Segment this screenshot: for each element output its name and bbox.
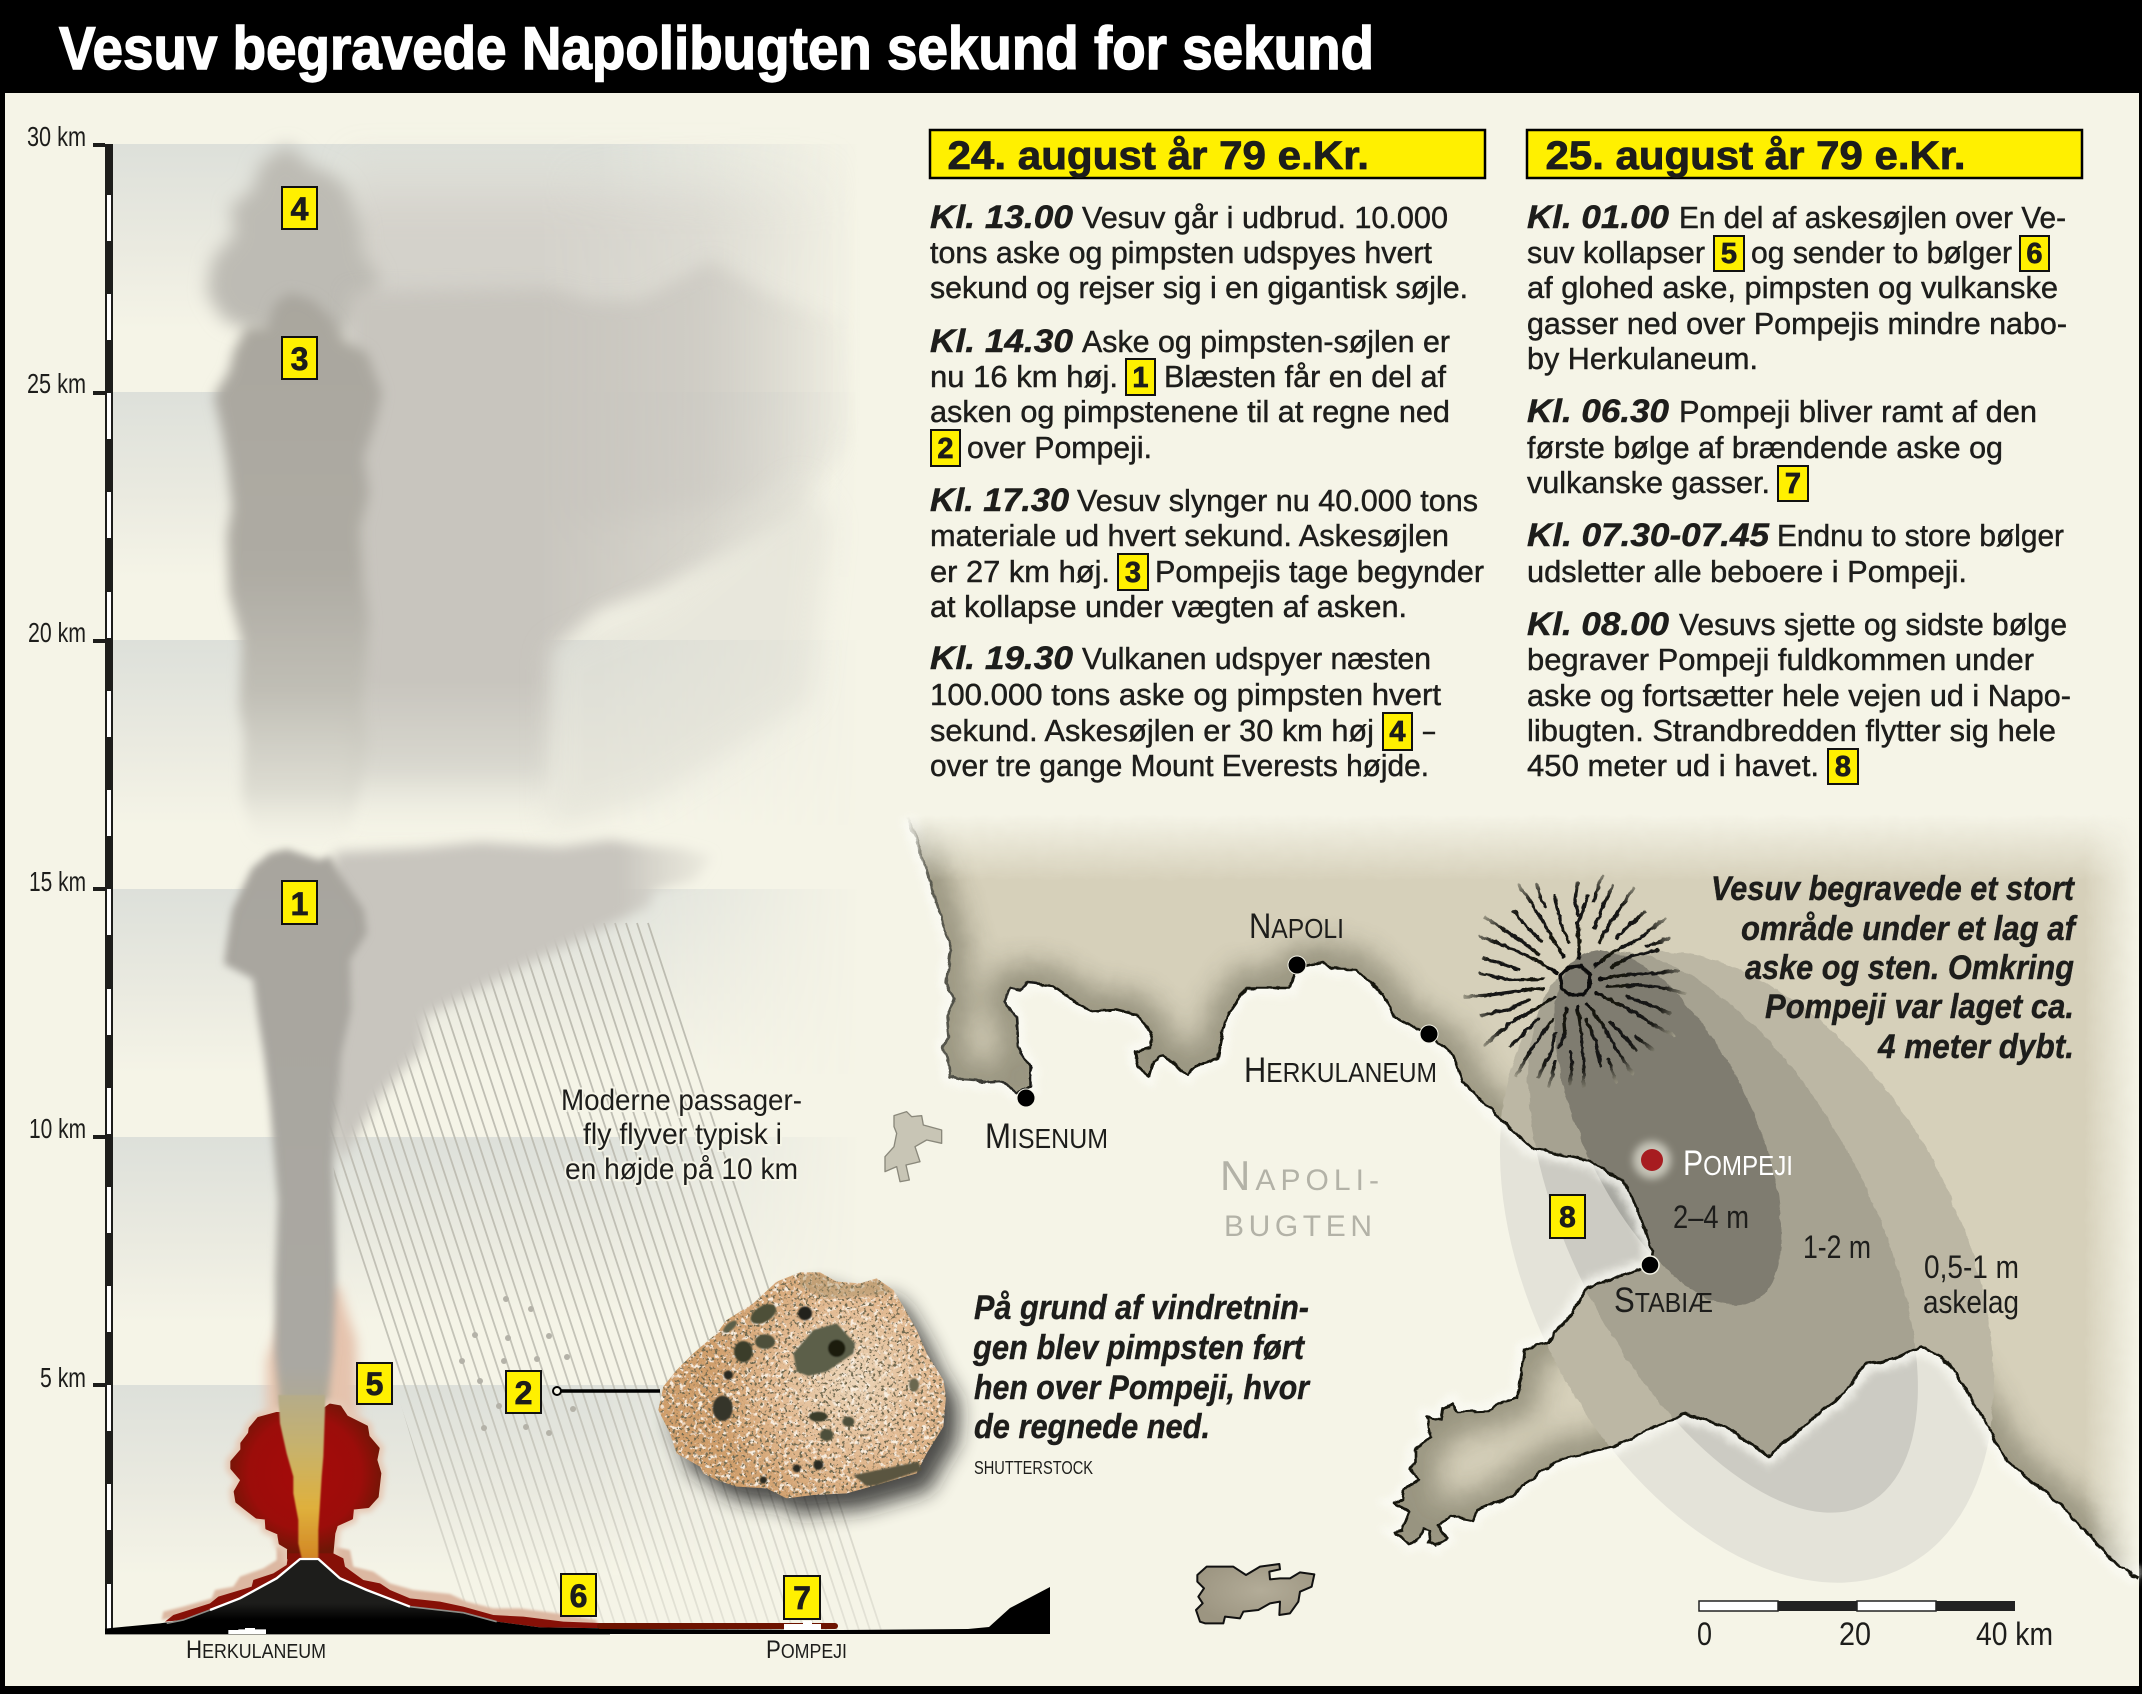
title: Vesuv begravede Napolibugten sekund for sekund (59, 15, 1374, 82)
entry: 19.30: 100.000 tons aske og pimpsten hvert (930, 678, 1442, 712)
entry: 14.30: Aske og pimpsten-søjlen er (1082, 325, 1450, 359)
pumice rain hatching (332, 922, 882, 1630)
entry: 13.00: sekund og rejser sig i en gigantisk søjle. (930, 271, 1468, 305)
badge 2: 2 (515, 1375, 532, 1411)
altitude axis: 25 km (27, 368, 86, 399)
caption: pumice wind direction: de regnede ned. (974, 1408, 1210, 1446)
entry: 06.30: Pompeji bliver ramt af den (1679, 395, 2037, 429)
ash depth labels: askelag (1923, 1284, 2019, 1320)
scale bar: 20 (1839, 1616, 1871, 1652)
entry: 14.30 (930, 323, 1450, 466)
city marker: Pompeji: POMPEJI (1683, 1144, 1793, 1183)
badge 7: 7 (793, 1580, 811, 1616)
entry: 01.00: suv kollapser (1527, 236, 1705, 270)
altitude axis: 30 km (27, 121, 86, 152)
badge 6: 6 (570, 1578, 587, 1614)
badge 2 (506, 1371, 541, 1413)
island: Procida (885, 1112, 942, 1182)
entry: 08.00: 450 meter ud i havet. (1527, 749, 1819, 783)
label: bay name: NAPOLI- (1220, 1152, 1379, 1199)
falling pumice dots (459, 1296, 576, 1436)
map caption: aske og sten. Omkring (1745, 949, 2074, 987)
entry: 14.30: Blæsten får en del af (1164, 360, 1447, 394)
caption: pumice wind direction: På grund af vindretnin- (974, 1289, 1309, 1327)
map caption (1711, 870, 2078, 1066)
entry: 19.30: 4 (1389, 716, 1406, 748)
map caption: område under et lag af (1741, 910, 2078, 948)
entry: 19.30: over tre gange Mount Everests højde. (930, 749, 1429, 783)
badge 8: 8 (1559, 1201, 1576, 1234)
glowing inner column (278, 1395, 325, 1558)
connector line from badge 2 to pumice (553, 1387, 660, 1395)
entry: 19.30: Vulkanen udspyer næsten (1082, 642, 1431, 676)
heading: 24 August: 24. august år 79 e.Kr. (948, 134, 1369, 178)
fire cloud halo (232, 1405, 380, 1558)
pink glow of collapse (267, 1285, 358, 1420)
entry: 07.30-07.45: udsletter alle beboere i Pompeji. (1527, 555, 1967, 589)
badge 1: 1 (291, 886, 308, 922)
entry: 08.00: 8 (1835, 751, 1851, 783)
ash depth labels: 1-2 m (1803, 1229, 1871, 1265)
panel: altitude chart with eruption column (27, 121, 1050, 1664)
panel: 24 August timeline (930, 130, 1485, 783)
entry: 17.30: materiale ud hvert sekund. Askesøjlen (930, 519, 1449, 553)
entry: 17.30: Vesuv slynger nu 40.000 tons (1077, 484, 1478, 518)
scale bar: 0 (1697, 1616, 1712, 1652)
note: passenger planes: en højde på 10 km (565, 1153, 798, 1186)
entry: 06.30: 7 (1785, 468, 1801, 500)
label: Herkulaneum: HERKULANEUM (186, 1636, 326, 1664)
entry: 17.30 (930, 482, 1484, 624)
white slope line (210, 1559, 410, 1610)
badge 3: 3 (291, 341, 308, 377)
volcano silhouette (105, 1558, 610, 1634)
altitude axis (27, 121, 113, 1634)
icon: Vesuvius crater with spokes (1465, 877, 1685, 1087)
city marker: Napoli (1249, 907, 1344, 974)
note: passenger planes: fly flyver typisk i (583, 1118, 782, 1151)
entry: 13.00: tons aske og pimpsten udspyes hvert (930, 236, 1433, 270)
badge 5 (357, 1363, 392, 1404)
entry: 17.30: at kollapse under vægten af asken. (930, 590, 1407, 624)
badge 8 (1550, 1195, 1585, 1238)
city marker: Napoli: NAPOLI (1249, 907, 1344, 946)
label: bay name: BUGTEN (1224, 1210, 1372, 1243)
entry: 06.30: første bølge af brændende aske og (1527, 431, 2003, 465)
entry: 07.30-07.45: Endnu to store bølger (1777, 519, 2064, 553)
ash column lower plume (214, 293, 382, 843)
caption: pumice wind direction: SHUTTERSTOCK (974, 1458, 1093, 1478)
label: Pompeji: POMPEJI (766, 1636, 847, 1664)
entry: 19.30: Kl. 19.30 (930, 640, 1073, 676)
entry: 06.30: Kl. 06.30 (1527, 393, 1669, 429)
fire cloud (5) (232, 1405, 380, 1558)
altitude axis: 5 km (40, 1362, 86, 1393)
entry: 01.00: 5 (1721, 238, 1737, 270)
entry: 13.00: Kl. 13.00 (930, 199, 1073, 235)
badge 3 (282, 337, 317, 379)
caption: pumice wind direction (972, 1289, 1311, 1478)
altitude bands (113, 144, 772, 1512)
caption: pumice wind direction: gen blev pimpsten ført (972, 1329, 1306, 1367)
heading: 24 August (930, 130, 1485, 178)
entry: 08.00: aske og fortsætter hele vejen ud i Napo- (1527, 679, 2071, 713)
caption: pumice wind direction: hen over Pompeji, hvor (974, 1369, 1311, 1407)
note: passenger planes: Moderne passager- (561, 1084, 802, 1117)
entry: 01.00: En del af askesøjlen over Ve- (1679, 201, 2066, 235)
entry: 01.00 (1527, 199, 2067, 376)
entry: 08.00: Kl. 08.00 (1527, 606, 1669, 642)
panel: map of the Bay of Naples (885, 805, 2139, 1667)
entry: 17.30: 3 (1125, 557, 1141, 589)
land with coastline and ash layers (906, 818, 2142, 1588)
faint ash wash below drift (550, 480, 830, 830)
entry: 19.30: sekund. Askesøjlen er 30 km høj (930, 714, 1374, 748)
volcano, flows and fire cloud (105, 1395, 610, 1634)
scale bar (1697, 1601, 2053, 1652)
panel: 25 August timeline (1527, 130, 2082, 784)
entry: 06.30: vulkanske gasser. (1527, 466, 1770, 500)
label: bay name (1220, 1152, 1379, 1243)
buildings: Pompeji (784, 1621, 821, 1630)
entry: 14.30: asken og pimpstenene til at regne ned (930, 395, 1450, 429)
entry: 17.30: Pompejis tage begynder (1155, 555, 1484, 589)
entry: 08.00 (1527, 606, 2071, 784)
heading: 25 August: 25. august år 79 e.Kr. (1546, 134, 1966, 178)
entry: 01.00: og sender to bølger (1751, 236, 2012, 270)
drifting ash cloud, main (350, 264, 816, 798)
entry: 14.30: over Pompeji. (967, 431, 1152, 465)
map caption: Vesuv begravede et stort (1711, 870, 2076, 908)
badge 5: 5 (366, 1366, 383, 1402)
ash depth labels (1673, 1199, 2019, 1320)
drifting ash cloud, upper (358, 178, 802, 392)
scale bar: 40 km (1976, 1616, 2053, 1652)
entry: 19.30 (930, 640, 1442, 783)
ash column upper cloud (4) (207, 145, 379, 340)
ash depth labels: 2–4 m (1673, 1199, 1749, 1235)
entry: 08.00: libugten. Strandbredden flytter sig hele (1527, 714, 2056, 748)
city marker: Pompeji (1633, 1141, 1793, 1183)
buildings: Herkulaneum (228, 1628, 266, 1634)
entry: 14.30: 1 (1132, 362, 1149, 394)
map caption: Pompeji var laget ca. (1765, 988, 2074, 1026)
entry: 01.00: af glohed aske, pimpsten og vulkanske (1527, 271, 2058, 305)
entry: 13.00 (930, 199, 1468, 305)
ground to the east (600, 1587, 1050, 1634)
entry: 07.30-07.45 (1527, 517, 2064, 589)
altitude axis: 15 km (29, 866, 86, 897)
ash drift at 16 km (320, 840, 712, 1165)
entry: 14.30: 2 (937, 433, 954, 465)
badge 1 (282, 881, 317, 924)
city marker: Misenum (985, 1089, 1108, 1156)
ash column main (224, 849, 367, 1420)
entry: 17.30: Kl. 17.30 (930, 482, 1069, 518)
map caption: 4 meter dybt. (1877, 1028, 2074, 1066)
grey slope ends (167, 1607, 497, 1623)
altitude axis: 10 km (29, 1113, 86, 1144)
red flow (165, 1553, 610, 1628)
city marker: Stabiae: STABIÆ (1614, 1281, 1713, 1320)
entry: 14.30: nu 16 km høj. (930, 360, 1118, 394)
entry: 13.00: Vesuv går i udbrud. 10.000 (1082, 201, 1448, 235)
altitude axis: 20 km (28, 617, 86, 648)
entry: 07.30-07.45: Kl. 07.30-07.45 (1527, 517, 1770, 553)
note: passenger planes (561, 1084, 802, 1186)
badge 6 (561, 1574, 596, 1616)
entry: 17.30: er 27 km høj. (930, 555, 1110, 589)
heading: 25 August (1527, 130, 2082, 178)
entry: 01.00: by Herkulaneum. (1527, 342, 1758, 376)
entry: 19.30: – (1423, 714, 1435, 748)
entry: 01.00: Kl. 01.00 (1527, 199, 1669, 235)
ash layers over sea (1399, 867, 2095, 1667)
city marker: Herkulaneum: HERKULANEUM (1244, 1051, 1437, 1090)
city marker: Misenum: MISENUM (985, 1117, 1108, 1156)
entry: 01.00: 6 (2026, 238, 2043, 270)
entry: 14.30: Kl. 14.30 (930, 323, 1073, 359)
entry: 08.00: Vesuvs sjette og sidste bølge (1679, 608, 2067, 642)
pumice stone with shadow (658, 1272, 959, 1515)
hot flow along ground (600, 1623, 835, 1629)
badge 7 (784, 1576, 820, 1619)
badge 4: 4 (291, 191, 309, 227)
entry: 08.00: begraver Pompeji fuldkommen under (1527, 643, 2034, 677)
ash depth labels: 0,5-1 m (1924, 1249, 2019, 1285)
flow halo (162, 1547, 597, 1623)
city marker: Stabiae (1614, 1256, 1713, 1320)
city marker: Herkulaneum (1244, 1025, 1438, 1090)
badge 4 (282, 187, 317, 229)
island: Capri (1196, 1564, 1314, 1623)
entry: 01.00: gasser ned over Pompejis mindre nabo- (1527, 307, 2067, 341)
entry: 06.30 (1527, 393, 2037, 501)
